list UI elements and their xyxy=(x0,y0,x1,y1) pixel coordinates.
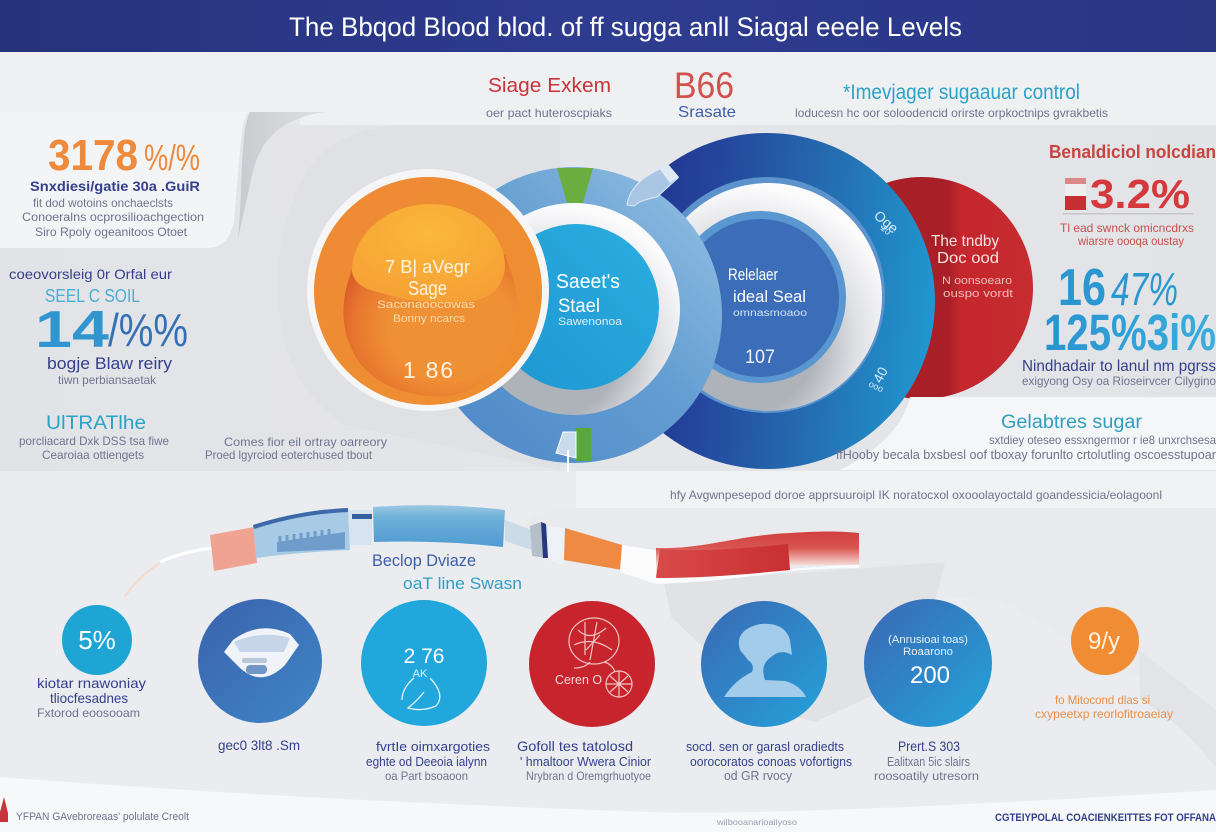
stat block: blue 14%: 14 xyxy=(35,301,109,359)
inner blue circle: omnasmoaoo xyxy=(733,308,808,319)
item 7: orange badge: cxypeetxp reorlofitroaeiay xyxy=(1035,707,1173,721)
ring labels xyxy=(867,207,902,394)
item 1: 5% xyxy=(37,605,146,720)
item 5: person icon: oorocoratos conoas vofortigns xyxy=(690,754,852,769)
item 4: red organ icon: Ceren O xyxy=(555,672,602,687)
footer text left: YFPAN GAvebroreaas' polulate Creolt xyxy=(16,811,189,823)
item 6: 200: 200 xyxy=(910,662,950,689)
text block: middle note xyxy=(205,435,387,462)
icon: fruit outline xyxy=(402,678,440,710)
item 6: 200 xyxy=(864,599,992,783)
footer xyxy=(0,777,1216,832)
item 5: person icon: od GR rvocy xyxy=(724,768,792,783)
text block: Ultrathe: porcliacard Dxk DSS tsa fiwe xyxy=(19,434,169,448)
panel: left stat card xyxy=(0,112,248,248)
syringe labels: Beclop Dviaze xyxy=(372,551,476,570)
cyan circle xyxy=(493,224,659,390)
text line: below circles: hfy Avgwnpesepod doroe apprsuuroipl IK noratocxol oxooolayoctald goandessicia/eolagoonl xyxy=(670,488,1162,502)
panel: galabtres sugar note xyxy=(836,397,1216,470)
item 4: red organ icon: ' hmaltoor Wwera Cinior xyxy=(520,754,652,769)
item 3: 2 76 xyxy=(361,600,491,783)
stat: orange percentage: %/% xyxy=(144,137,200,178)
red circle xyxy=(811,177,1033,399)
cyan circle: Sawenonoa xyxy=(558,316,623,328)
icon: cup device xyxy=(224,628,299,677)
top heading: centre: Srasate xyxy=(678,104,736,121)
stat block: blue 14%: tiwn perbiansaetak xyxy=(58,373,157,387)
text block: Ultrathe: Cearoiaa ottiengets xyxy=(42,448,144,462)
red circle text: Doc ood xyxy=(937,250,999,267)
item 6: 200: Roaarono xyxy=(903,646,953,658)
red circle text: N oonsoearo xyxy=(942,275,1012,287)
ring labels: Oge xyxy=(871,207,902,236)
item 4: red organ icon: Nrybran d Oremgrhuotyoe xyxy=(526,769,651,783)
item 2: device icon xyxy=(198,599,322,753)
stat: orange percentage: 3178 xyxy=(48,131,138,180)
blue note: exigyong Osy oa Rioseirvcer Cilygino xyxy=(1022,374,1216,388)
card text xyxy=(22,178,204,239)
item 7: orange badge: fo Mitocond dlas si xyxy=(1055,693,1150,707)
orange circle text: Sage xyxy=(408,278,447,300)
item 6: 200: (Anrusioai toas) xyxy=(888,634,968,646)
top heading: left xyxy=(486,75,612,120)
title: The Bbqod Blood blod. of ff sugga anll Siagal eeele Levels xyxy=(289,12,962,42)
stat block: blue 14%: /%% xyxy=(108,304,188,356)
inner blue circle: Relelaer xyxy=(728,265,778,284)
title banner xyxy=(0,0,1216,52)
ring labels: 40 xyxy=(870,364,891,385)
ring labels: ooo xyxy=(867,379,885,394)
item 3: 2 76: fvrtIe oimxargoties xyxy=(376,739,491,754)
icon: green bottom tab with needle xyxy=(556,428,591,472)
cyan circle: Stael xyxy=(558,296,600,317)
item 1: 5%: kiotar rnawoniay xyxy=(37,675,146,691)
stat: blue percentages: 16 xyxy=(1058,259,1106,317)
stat block: blue 14%: coeovorsleig 0r Orfal eur xyxy=(9,266,172,282)
light blue ring xyxy=(426,167,722,472)
top heading: right: loducesn hc oor soloodencid orirste orpkoctnips gvrakbetis xyxy=(795,106,1108,120)
icon: red chart xyxy=(1065,178,1086,210)
item 5: person icon xyxy=(686,601,852,783)
item 3: 2 76: eghte od Deeoia ialynn xyxy=(366,754,487,769)
card text: Siro Rpoly ogeanitoos Otoet xyxy=(35,225,188,239)
text block: middle note: Proed lgyrciod eoterchused tbout xyxy=(205,448,373,462)
red note: Tl ead swnck omicncdrxs xyxy=(1060,221,1194,235)
red note xyxy=(1060,221,1194,248)
item 1: 5%: tliocfesadnes xyxy=(50,690,128,706)
syringe labels: oaT line Swasn xyxy=(403,574,522,593)
icon: connector clip xyxy=(627,164,679,206)
item 5: person icon: socd. sen or garasl oradiedts xyxy=(686,739,844,754)
item 4: red organ icon: Gofoll tes tatolosd xyxy=(517,738,633,754)
text block: Ultrathe xyxy=(19,413,169,462)
top heading: right xyxy=(795,81,1108,120)
stat: red percentage: 3.2% xyxy=(1090,171,1190,217)
dark blue ring xyxy=(599,133,935,469)
orange circle text: 1 86 xyxy=(403,357,453,383)
red circle text: ouspo vordt xyxy=(943,288,1013,300)
item 2: device icon: gec0 3lt8 .Sm xyxy=(218,737,300,753)
syringe labels xyxy=(372,551,522,593)
item 7: orange badge: 9/y xyxy=(1088,628,1120,655)
item 7: orange badge xyxy=(1035,607,1173,721)
card text: Snxdiesi/gatie 30a .GuiR xyxy=(30,178,200,194)
item 6: 200: roosoatily utresorn xyxy=(874,769,979,783)
item 3: 2 76: AK xyxy=(413,668,428,680)
text block: middle note: Comes fior eil ortray oarreory xyxy=(224,435,387,449)
needle xyxy=(125,548,212,596)
top heading: centre: B66 xyxy=(674,65,734,106)
stat block: blue 14% xyxy=(9,266,188,387)
item 6: 200: Prert.S 303 xyxy=(898,738,960,754)
item 4: red organ icon xyxy=(517,601,655,783)
item 1: 5%: 5% xyxy=(78,625,116,655)
stat block: blue 14%: SEEL C SOIL xyxy=(45,286,140,306)
panel: right stats xyxy=(1022,142,1216,388)
ring labels: 10 xyxy=(879,223,893,237)
inner blue circle: ideal Seal xyxy=(733,287,806,306)
red circle text xyxy=(931,233,1013,300)
top heading: left: Siage Exkem xyxy=(488,75,611,97)
orange circle text: 7 B| aVegr xyxy=(385,257,470,277)
orange circle text: Saconaoocowas xyxy=(377,299,476,311)
top heading: right: *Imevjager sugaauar control xyxy=(843,81,1080,104)
stat: blue percentages: 47% xyxy=(1111,263,1178,315)
orange circle text xyxy=(377,257,476,383)
cyan circle: Saeet's xyxy=(556,271,620,293)
inner blue circle: 107 xyxy=(745,347,775,368)
item 1: 5%: Fxtorod eoosooam xyxy=(37,706,140,720)
blue note xyxy=(1022,358,1216,388)
footer text centre: wilbooanarioaiiyoso xyxy=(716,818,798,827)
icon: brain outline xyxy=(569,618,632,697)
text block: Ultrathe: UlTRATlhe xyxy=(46,413,146,434)
orange circle xyxy=(307,169,549,411)
top heading: left: oer pact huteroscpiaks xyxy=(486,106,612,120)
card text: fit dod wotoins onchaeclsts xyxy=(33,196,173,210)
orange circle text: Bonny ncarcs xyxy=(393,313,466,325)
item 3: 2 76: 2 76 xyxy=(404,645,444,668)
inner blue circle xyxy=(674,211,846,383)
stat block: blue 14%: bogje Blaw reiry xyxy=(47,354,173,373)
card text: Conoeralns ocprosilioachgection xyxy=(22,210,204,224)
stat: blue percentages xyxy=(1044,259,1216,361)
item 3: 2 76: oa Part bsoaoon xyxy=(385,769,468,783)
icon: person xyxy=(724,624,806,697)
icon: green top tab xyxy=(557,168,593,203)
red note: wiarsre oooqa oustay xyxy=(1077,234,1184,248)
stat: orange percentage xyxy=(48,131,200,180)
red circle text: The tndby xyxy=(931,233,999,250)
item 6: 200: Ealitxan 5ic slairs xyxy=(887,754,970,769)
syringe illustration xyxy=(125,505,859,596)
panel: galabtres sugar note: Gelabtres sugar xyxy=(1001,412,1143,433)
icon: footer logo xyxy=(0,797,8,822)
